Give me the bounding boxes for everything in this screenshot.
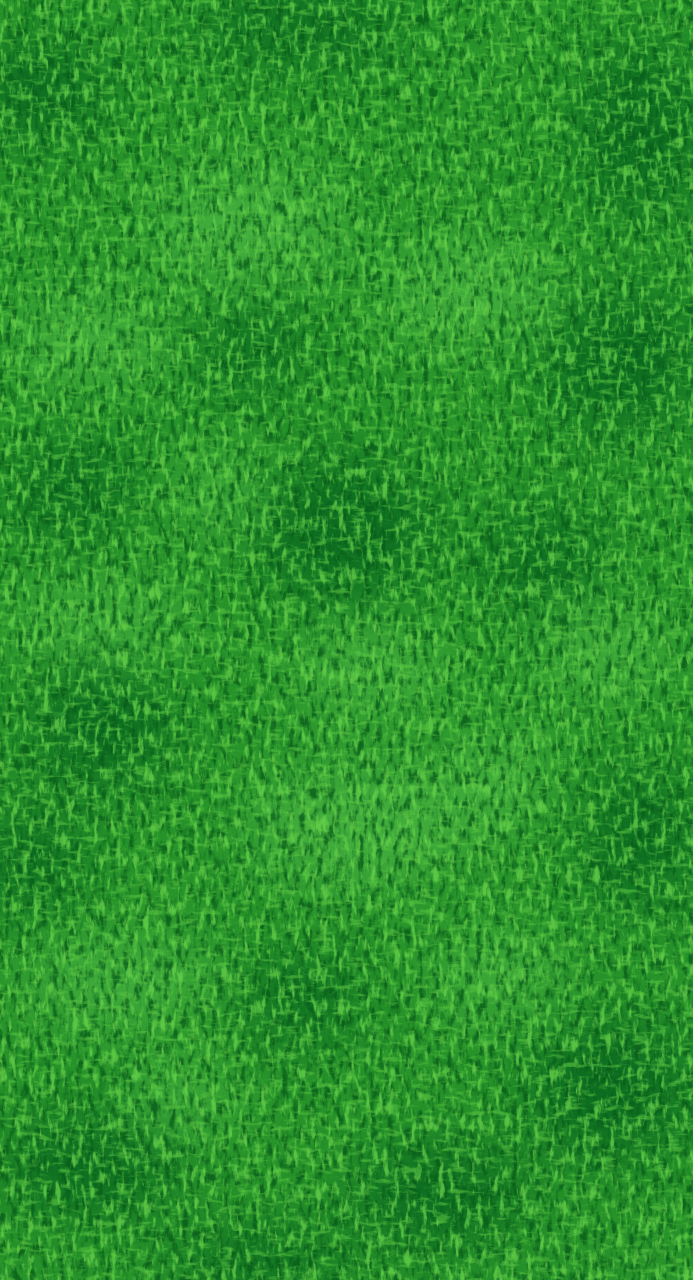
light patches — [10, 165, 670, 1130]
